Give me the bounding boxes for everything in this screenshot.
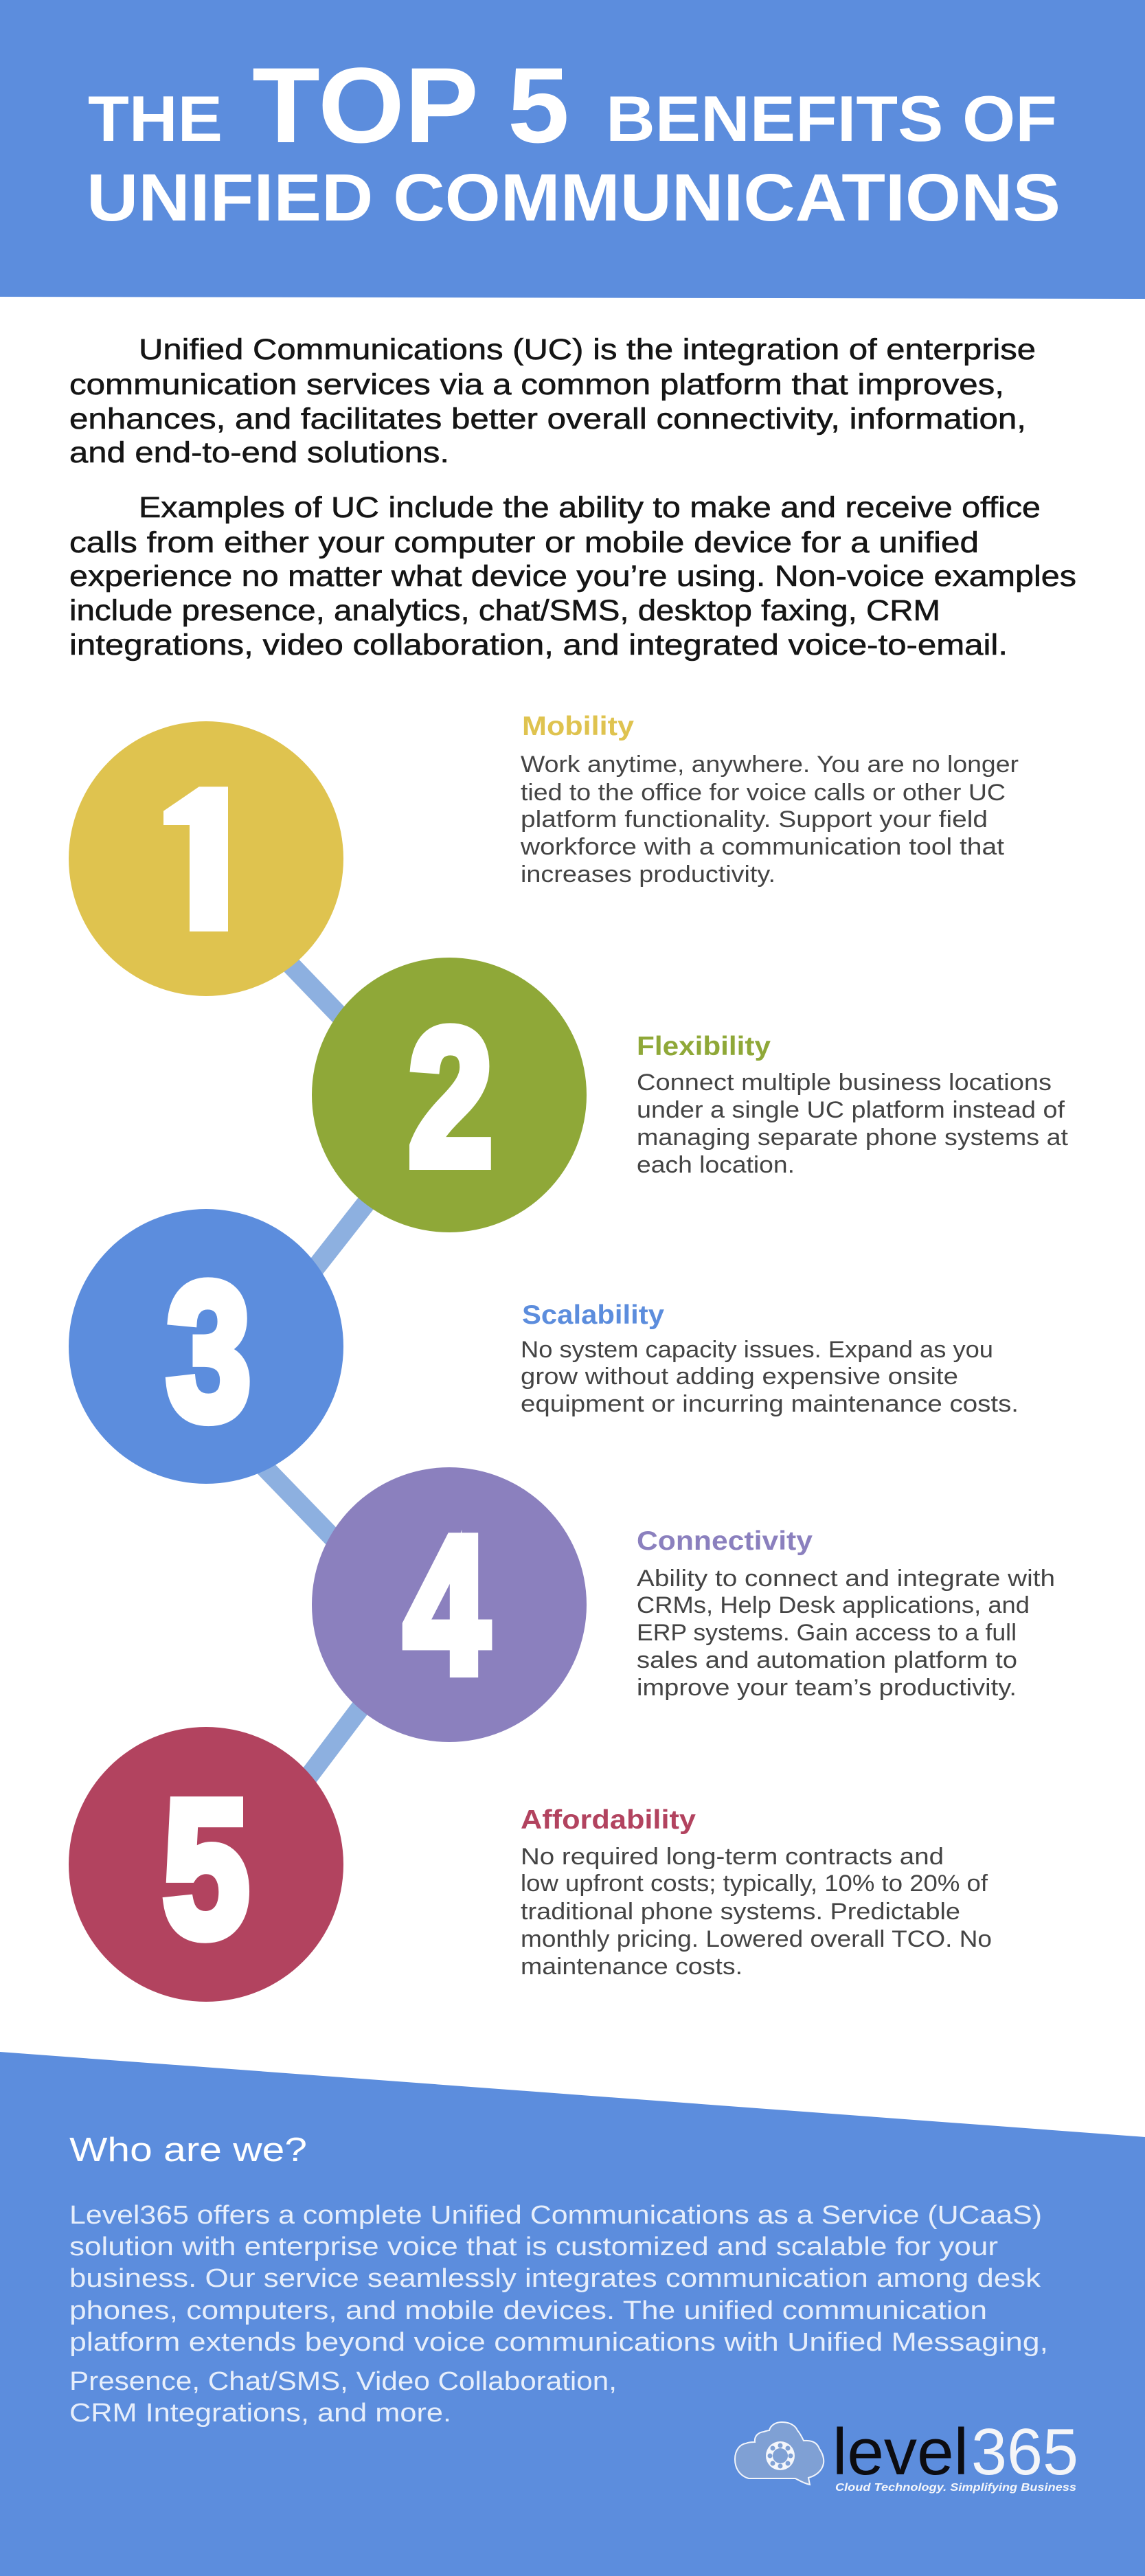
- benefit 5: affordability: No required long-term contracts and: [521, 1844, 944, 1870]
- benefit 2: flexibility: managing separate phone systems at: [637, 1125, 1069, 1151]
- intro paragraph 2: calls from either your computer or mobile device for a unified: [69, 526, 979, 559]
- number circle 5: [69, 1727, 343, 2002]
- icon: cloud with telephone dial: [735, 2422, 824, 2485]
- benefit 2: flexibility: [637, 1032, 1069, 1178]
- benefit 3: scalability: No system capacity issues. Expand as you: [521, 1337, 993, 1363]
- number circle 2: [312, 958, 587, 1232]
- benefit 4: connectivity: improve your team’s productivity.: [637, 1675, 1017, 1701]
- intro paragraph 1: [69, 333, 1036, 469]
- header banner: [0, 0, 1145, 299]
- logo wordmark: level: [832, 2415, 968, 2489]
- benefit 5: affordability: low upfront costs; typically, 10% to 20% of: [521, 1871, 988, 1897]
- number circle 5: 5: [163, 1761, 249, 1978]
- intro paragraph 1: and end-to-end solutions.: [69, 436, 449, 469]
- benefit 3: scalability: Scalability: [522, 1300, 664, 1330]
- logo wordmark: 365: [971, 2415, 1078, 2489]
- benefit 2: flexibility: each location.: [637, 1152, 795, 1178]
- title: BENEFITS OF: [606, 82, 1057, 155]
- benefit 2: flexibility: under a single UC platform instead of: [637, 1097, 1065, 1123]
- who are we text: Level365 offers a complete Unified Communications as a Service (UCaaS): [69, 2201, 1042, 2230]
- benefit 1: mobility: workforce with a communication tool that: [520, 834, 1005, 860]
- benefit 5: affordability: monthly pricing. Lowered overall TCO. No: [521, 1926, 992, 1952]
- who are we text: platform extends beyond voice communications with Unified Messaging,: [69, 2328, 1048, 2357]
- benefit 3: scalability: grow without adding expensive onsite: [521, 1364, 958, 1390]
- benefit 5: affordability: Affordability: [521, 1805, 696, 1835]
- footer panel: [0, 2052, 1145, 2576]
- benefit 4: connectivity: Connectivity: [637, 1526, 813, 1556]
- who are we text: Presence, Chat/SMS, Video Collaboration,: [69, 2367, 617, 2396]
- number circle 3: [69, 1209, 343, 1484]
- benefit 1: mobility: platform functionality. Support your field: [521, 806, 988, 833]
- who are we text: solution with enterprise voice that is customized and scalable for your: [69, 2233, 998, 2261]
- benefit 5: affordability: maintenance costs.: [521, 1954, 742, 1980]
- benefit 4: connectivity: sales and automation platform to: [637, 1647, 1017, 1673]
- title: TOP 5: [252, 46, 569, 166]
- benefit 3: scalability: equipment or incurring maintenance costs.: [521, 1391, 1019, 1417]
- logo wordmark: [832, 2415, 1078, 2494]
- intro paragraph 2: experience no matter what device you’re using. Non-voice examples: [69, 560, 1076, 593]
- connector lines between circles: [247, 941, 385, 1803]
- benefit 4: connectivity: Ability to connect and integrate with: [637, 1566, 1055, 1592]
- intro paragraph 1: Unified Communications (UC) is the integration of enterprise: [139, 333, 1036, 366]
- title: UNIFIED COMMUNICATIONS: [87, 160, 1061, 235]
- who are we text: [69, 2201, 1048, 2428]
- who are we heading: Who are we?: [69, 2132, 307, 2169]
- benefit 1: mobility: Mobility: [522, 712, 634, 741]
- benefit 1: mobility: Work anytime, anywhere. You are no longer: [521, 752, 1019, 778]
- intro paragraph 2: Examples of UC include the ability to make and receive office: [139, 491, 1041, 524]
- benefit 4: connectivity: ERP systems. Gain access to a full: [637, 1620, 1017, 1646]
- benefit 1: mobility: tied to the office for voice calls or other UC: [521, 780, 1006, 806]
- benefit 5: affordability: traditional phone systems. Predictable: [521, 1899, 960, 1925]
- logo wordmark: Cloud Technology. Simplifying Business: [835, 2482, 1076, 2494]
- benefit 1: mobility: increases productivity.: [521, 861, 775, 888]
- who are we text: business. Our service seamlessly integrates communication among desk: [69, 2264, 1041, 2293]
- benefit 5: affordability: [521, 1805, 992, 1980]
- intro paragraph 2: integrations, video collaboration, and integrated voice-to-email.: [69, 629, 1008, 662]
- title: THE: [88, 82, 223, 155]
- benefit 2: flexibility: Flexibility: [637, 1032, 771, 1061]
- intro paragraph 2: include presence, analytics, chat/SMS, desktop faxing, CRM: [69, 594, 940, 627]
- benefit 2: flexibility: Connect multiple business locations: [637, 1070, 1052, 1096]
- who are we text: CRM Integrations, and more.: [69, 2399, 451, 2428]
- number circle 4: 4: [405, 1496, 488, 1713]
- number circle 1: 1: [156, 751, 259, 967]
- benefit 1: mobility: [520, 712, 1019, 888]
- number circle 4: [312, 1467, 587, 1742]
- benefit 4: connectivity: [637, 1526, 1055, 1701]
- level365 logo: [735, 2415, 1078, 2494]
- intro paragraph 1: enhances, and facilitates better overall connectivity, information,: [69, 403, 1026, 436]
- number circle 1: [69, 721, 343, 996]
- intro paragraph 2: [69, 491, 1076, 662]
- intro paragraph 1: communication services via a common platform that improves,: [69, 368, 1004, 401]
- title: [87, 46, 1061, 235]
- number circle 3: 3: [167, 1243, 251, 1460]
- benefit 4: connectivity: CRMs, Help Desk applications, and: [637, 1592, 1030, 1618]
- benefit 3: scalability: [521, 1300, 1019, 1417]
- number circle 2: 2: [409, 988, 492, 1206]
- who are we text: phones, computers, and mobile devices. The unified communication: [69, 2296, 987, 2325]
